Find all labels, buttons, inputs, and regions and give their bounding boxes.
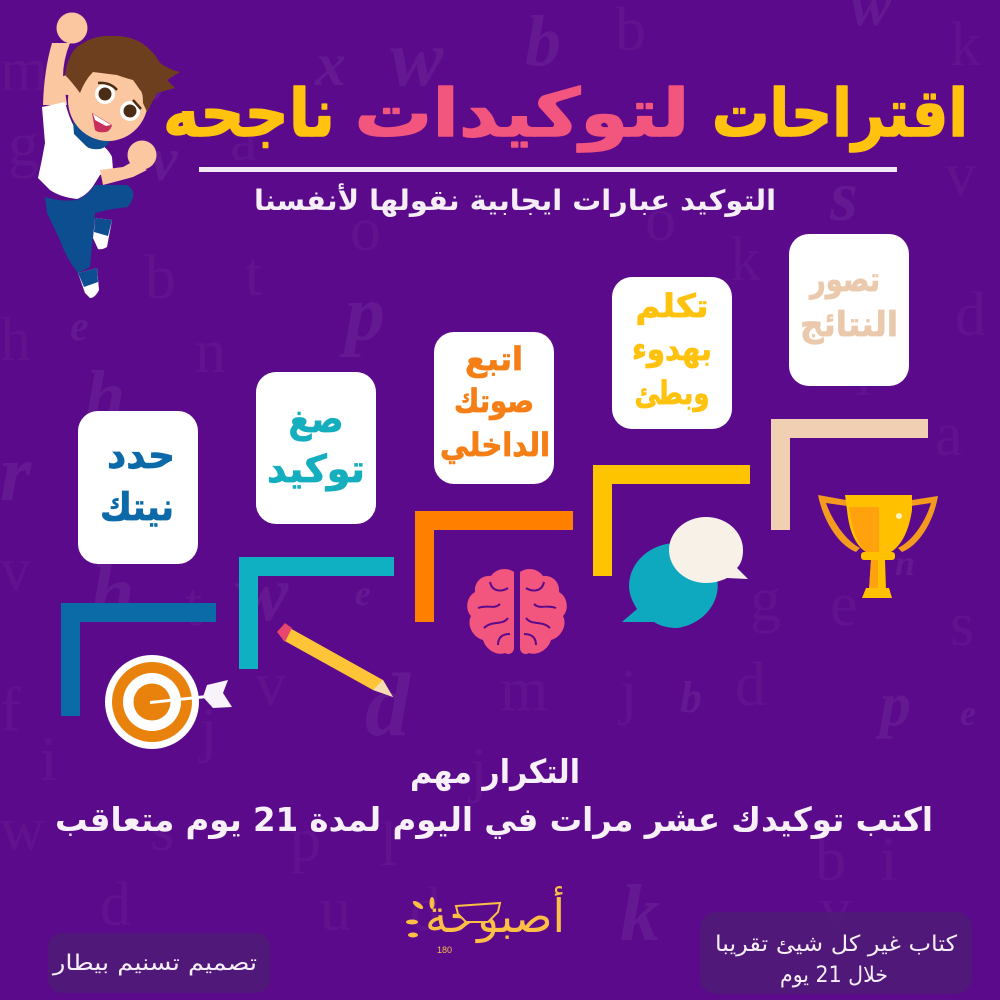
text block: repetition note bbox=[55, 752, 933, 840]
text: e bbox=[960, 693, 976, 733]
footer badge: designer credit: تصميم تسنيم بيطار bbox=[52, 951, 257, 976]
text: j bbox=[888, 276, 907, 344]
text: v bbox=[255, 651, 286, 719]
text: p bbox=[290, 806, 321, 874]
text: a bbox=[935, 401, 963, 469]
text: j bbox=[468, 736, 487, 804]
text: w bbox=[235, 550, 289, 638]
step 3: card: صوتك bbox=[454, 382, 534, 420]
step 1: card bbox=[78, 411, 198, 564]
text: v bbox=[820, 876, 851, 944]
text: s bbox=[150, 796, 174, 864]
text: j bbox=[198, 696, 217, 764]
text: b bbox=[815, 826, 846, 894]
text: s bbox=[950, 591, 974, 659]
bracket: step 5 bbox=[771, 419, 928, 530]
bracket: step 3 bbox=[415, 511, 573, 622]
text: b bbox=[525, 1, 561, 81]
text: v bbox=[150, 126, 179, 194]
icon: jumping boy bbox=[38, 12, 180, 298]
step 3: card bbox=[434, 332, 554, 484]
logo: أصبوحة bbox=[425, 886, 565, 944]
title underline bbox=[199, 167, 897, 172]
icon: trophy bbox=[818, 495, 938, 598]
step 2: card: توكيد bbox=[267, 447, 365, 491]
text: o bbox=[645, 186, 676, 254]
text: i bbox=[855, 341, 872, 409]
text: k bbox=[950, 11, 981, 79]
icon: brain bbox=[467, 569, 567, 654]
bracket: step 1 bbox=[61, 603, 216, 716]
text block: repetition note: اكتب توكيدك عشر مرات في اليوم لمدة 21 يوم متعاقب bbox=[55, 800, 933, 840]
text: i bbox=[880, 826, 897, 894]
title bbox=[163, 75, 968, 153]
footer badge: book credit: خلال 21 يوم bbox=[780, 963, 888, 988]
text: h bbox=[85, 356, 125, 436]
step 1: card: حدد bbox=[107, 433, 175, 477]
subtitle: التوكيد عبارات ايجابية نقولها لأنفسنا bbox=[254, 183, 776, 217]
step 1: card: نيتك bbox=[100, 485, 174, 529]
text: n bbox=[895, 543, 915, 583]
text: e bbox=[70, 304, 89, 350]
step 5: card bbox=[789, 234, 909, 386]
text: h bbox=[0, 306, 31, 374]
icon: speech bubbles bbox=[622, 517, 748, 628]
step 2: card: صغ bbox=[288, 397, 344, 441]
step 3: card: اتبع bbox=[465, 340, 523, 378]
text: b bbox=[680, 673, 702, 722]
text: k bbox=[620, 870, 660, 958]
text: d bbox=[955, 281, 986, 349]
title: ناجحه bbox=[163, 75, 335, 152]
text: u bbox=[320, 876, 351, 944]
text: n bbox=[195, 318, 226, 386]
step 4: card: تكلم bbox=[636, 287, 708, 325]
text: s bbox=[139, 46, 164, 114]
text: w bbox=[390, 15, 444, 103]
text: f bbox=[0, 676, 21, 744]
text: l bbox=[380, 811, 397, 879]
text: e bbox=[355, 573, 371, 613]
title: لتوكيدات bbox=[354, 75, 690, 153]
title: اقتراحات bbox=[712, 75, 968, 152]
text: m bbox=[500, 656, 548, 724]
text: j bbox=[618, 658, 637, 726]
step 3: card: الداخلي bbox=[440, 426, 550, 464]
text: a bbox=[230, 106, 258, 174]
text: p bbox=[339, 270, 385, 358]
logo bbox=[406, 886, 565, 955]
text: h bbox=[90, 550, 134, 638]
step 4: card bbox=[612, 277, 732, 429]
step 5: card: تصور bbox=[808, 260, 880, 300]
logo: 180 bbox=[437, 945, 452, 955]
text: o bbox=[350, 196, 381, 264]
text: k bbox=[730, 226, 761, 294]
text: t bbox=[185, 571, 202, 639]
text: d bbox=[410, 876, 441, 944]
text: s bbox=[829, 156, 858, 236]
text: x bbox=[314, 31, 346, 99]
text: p bbox=[875, 671, 911, 739]
text: d bbox=[735, 651, 766, 719]
icon: target with arrow bbox=[105, 655, 232, 749]
text: g bbox=[8, 111, 39, 179]
text: m bbox=[0, 36, 48, 104]
bracket: step 2 bbox=[239, 557, 394, 669]
text: g bbox=[750, 566, 781, 634]
step 2: card bbox=[256, 372, 376, 524]
text: t bbox=[245, 241, 262, 309]
text: d bbox=[100, 871, 131, 939]
bracket: step 4 bbox=[593, 465, 750, 576]
text: i bbox=[40, 726, 57, 794]
step 5: card: النتائج bbox=[800, 305, 898, 345]
text: e bbox=[830, 571, 858, 639]
text: d bbox=[365, 656, 412, 755]
step 4: card: بهدوء bbox=[632, 330, 712, 368]
step 4: card: وبطئ bbox=[634, 374, 710, 412]
text: v bbox=[0, 536, 31, 604]
text: v bbox=[945, 141, 976, 209]
text: b bbox=[145, 244, 176, 312]
footer badge: book credit bbox=[700, 912, 972, 994]
text: w bbox=[0, 796, 45, 864]
footer badge: book credit: كتاب غير كل شيئ تقريبا bbox=[715, 932, 958, 957]
text: r bbox=[0, 430, 32, 518]
footer badge: designer credit bbox=[48, 933, 270, 993]
text block: repetition note: التكرار مهم bbox=[410, 752, 580, 792]
icon: pencil bbox=[277, 623, 393, 697]
